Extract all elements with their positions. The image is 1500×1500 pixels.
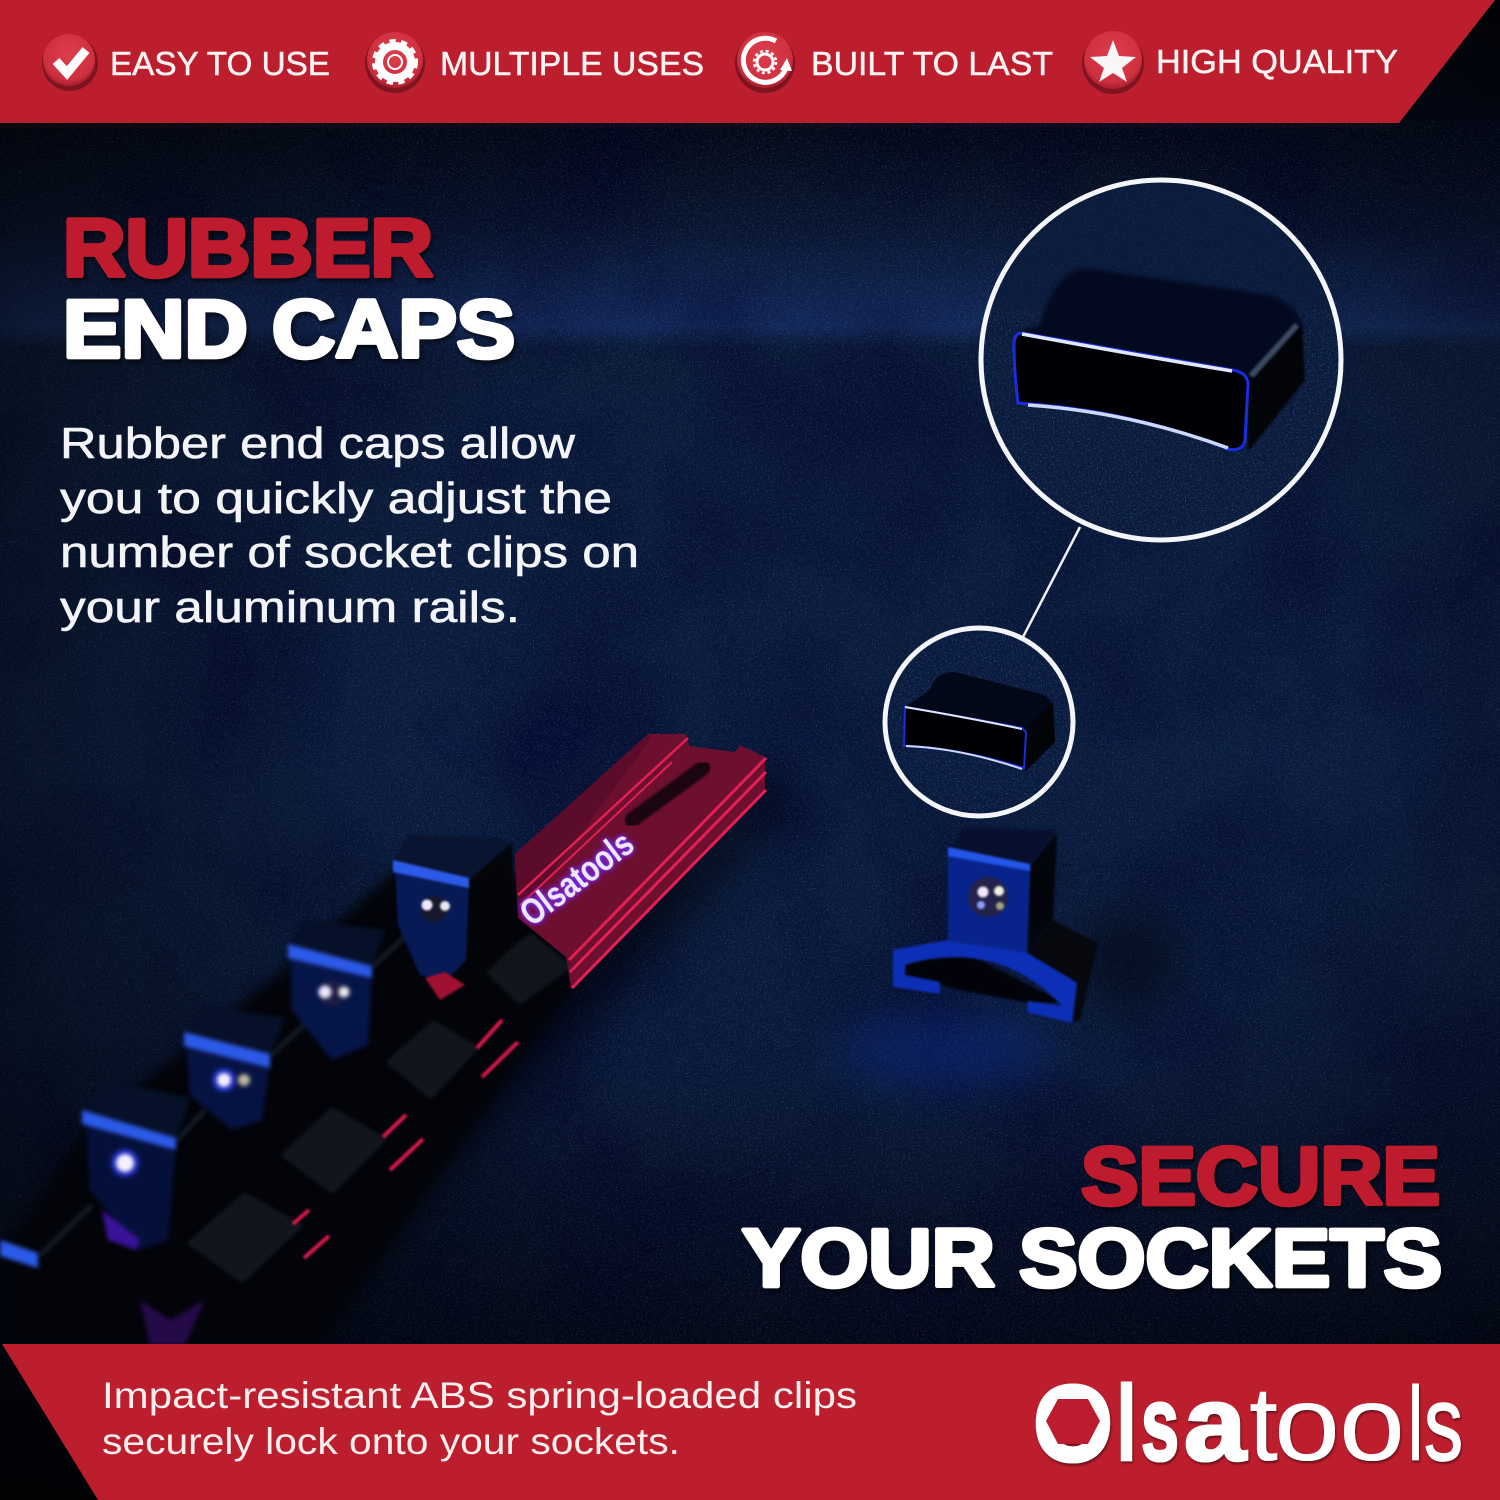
body text: you to quickly adjust the [60, 474, 612, 523]
body text: your aluminum rails. [60, 583, 520, 632]
small cap side [1025, 702, 1055, 772]
rail shadow [150, 770, 800, 1345]
clip side [1027, 832, 1057, 953]
top banner [0, 0, 1495, 123]
socket rail with clips [0, 734, 800, 1345]
cap side [1248, 325, 1305, 452]
logo: Olsatools [1034, 1365, 1463, 1483]
icon: checkmark button [42, 34, 98, 91]
logo: Olsatools: s [1424, 1365, 1463, 1483]
clip front face [948, 850, 1030, 955]
connector line between circles [1023, 527, 1080, 637]
cap top [1015, 268, 1302, 378]
clip 5 [0, 1240, 38, 1268]
heading: rubber end caps: RUBBER [63, 203, 433, 294]
label: built to last: BUILT TO LAST [811, 45, 1053, 82]
body text: Rubber end caps allow [60, 419, 575, 468]
clip 1 [393, 835, 514, 1000]
footer text: Impact-resistant ABS spring-loaded clips [102, 1375, 857, 1416]
heading: secure your sockets: SECURE [1081, 1131, 1440, 1222]
logo: Olsatools: l [1117, 1365, 1136, 1483]
clip side highlights [40, 925, 418, 1255]
cap front [1014, 333, 1248, 450]
red rail segments [293, 1020, 518, 1258]
bottom banner [2, 1344, 1500, 1500]
purple reflection [140, 1300, 205, 1345]
icon: cycle gear button [735, 32, 795, 93]
magnified detail: small circle [885, 628, 1075, 818]
logo: Olsatools: O [1034, 1365, 1112, 1483]
logo: Olsatools: o [1339, 1365, 1405, 1483]
heading: rubber end caps: END CAPS [63, 284, 515, 375]
clip 3 [184, 1005, 285, 1130]
body text: number of socket clips on [60, 528, 639, 577]
black clip row body [0, 850, 575, 1345]
label: multiple uses: MULTIPLE USES [440, 45, 704, 82]
footer text [102, 1375, 857, 1462]
heading: secure your sockets: YOUR SOCKETS [742, 1213, 1442, 1304]
clip under-arch shadow [905, 957, 1063, 1003]
engraved rail logo: Olsatools [512, 822, 641, 934]
label: high quality: HIGH QUALITY [1156, 43, 1398, 80]
clip 2 [288, 920, 385, 1060]
logo: Olsatools: l [1407, 1365, 1424, 1483]
aluminium rail end [512, 734, 766, 989]
icon: gear button [365, 32, 425, 93]
magnified detail: large circle [980, 180, 1342, 540]
logo: Olsatools: s [1141, 1365, 1179, 1483]
clip arched base [893, 940, 1077, 1023]
heading: secure your sockets [742, 1131, 1442, 1304]
small cap front [904, 707, 1026, 768]
logo: Olsatools: a [1184, 1365, 1247, 1483]
icon: star button [1082, 31, 1144, 94]
rail slot [632, 768, 703, 820]
clip right side feet [1027, 920, 1098, 1022]
clip top [948, 828, 1057, 867]
small cap top [905, 672, 1053, 730]
clip 4 [82, 1080, 190, 1250]
logo: Olsatools: o [1274, 1365, 1340, 1483]
rubber clip blocks [189, 935, 569, 1281]
footer text: securely lock onto your sockets. [102, 1421, 680, 1462]
standalone socket clip [893, 828, 1098, 1023]
heading: rubber end caps [63, 203, 515, 375]
body text [60, 419, 639, 632]
clip top edge highlight [948, 847, 1030, 871]
clip ball bearing [968, 877, 1008, 917]
logo: Olsatools: t [1249, 1365, 1278, 1483]
label: easy to use: EASY TO USE [110, 45, 330, 82]
